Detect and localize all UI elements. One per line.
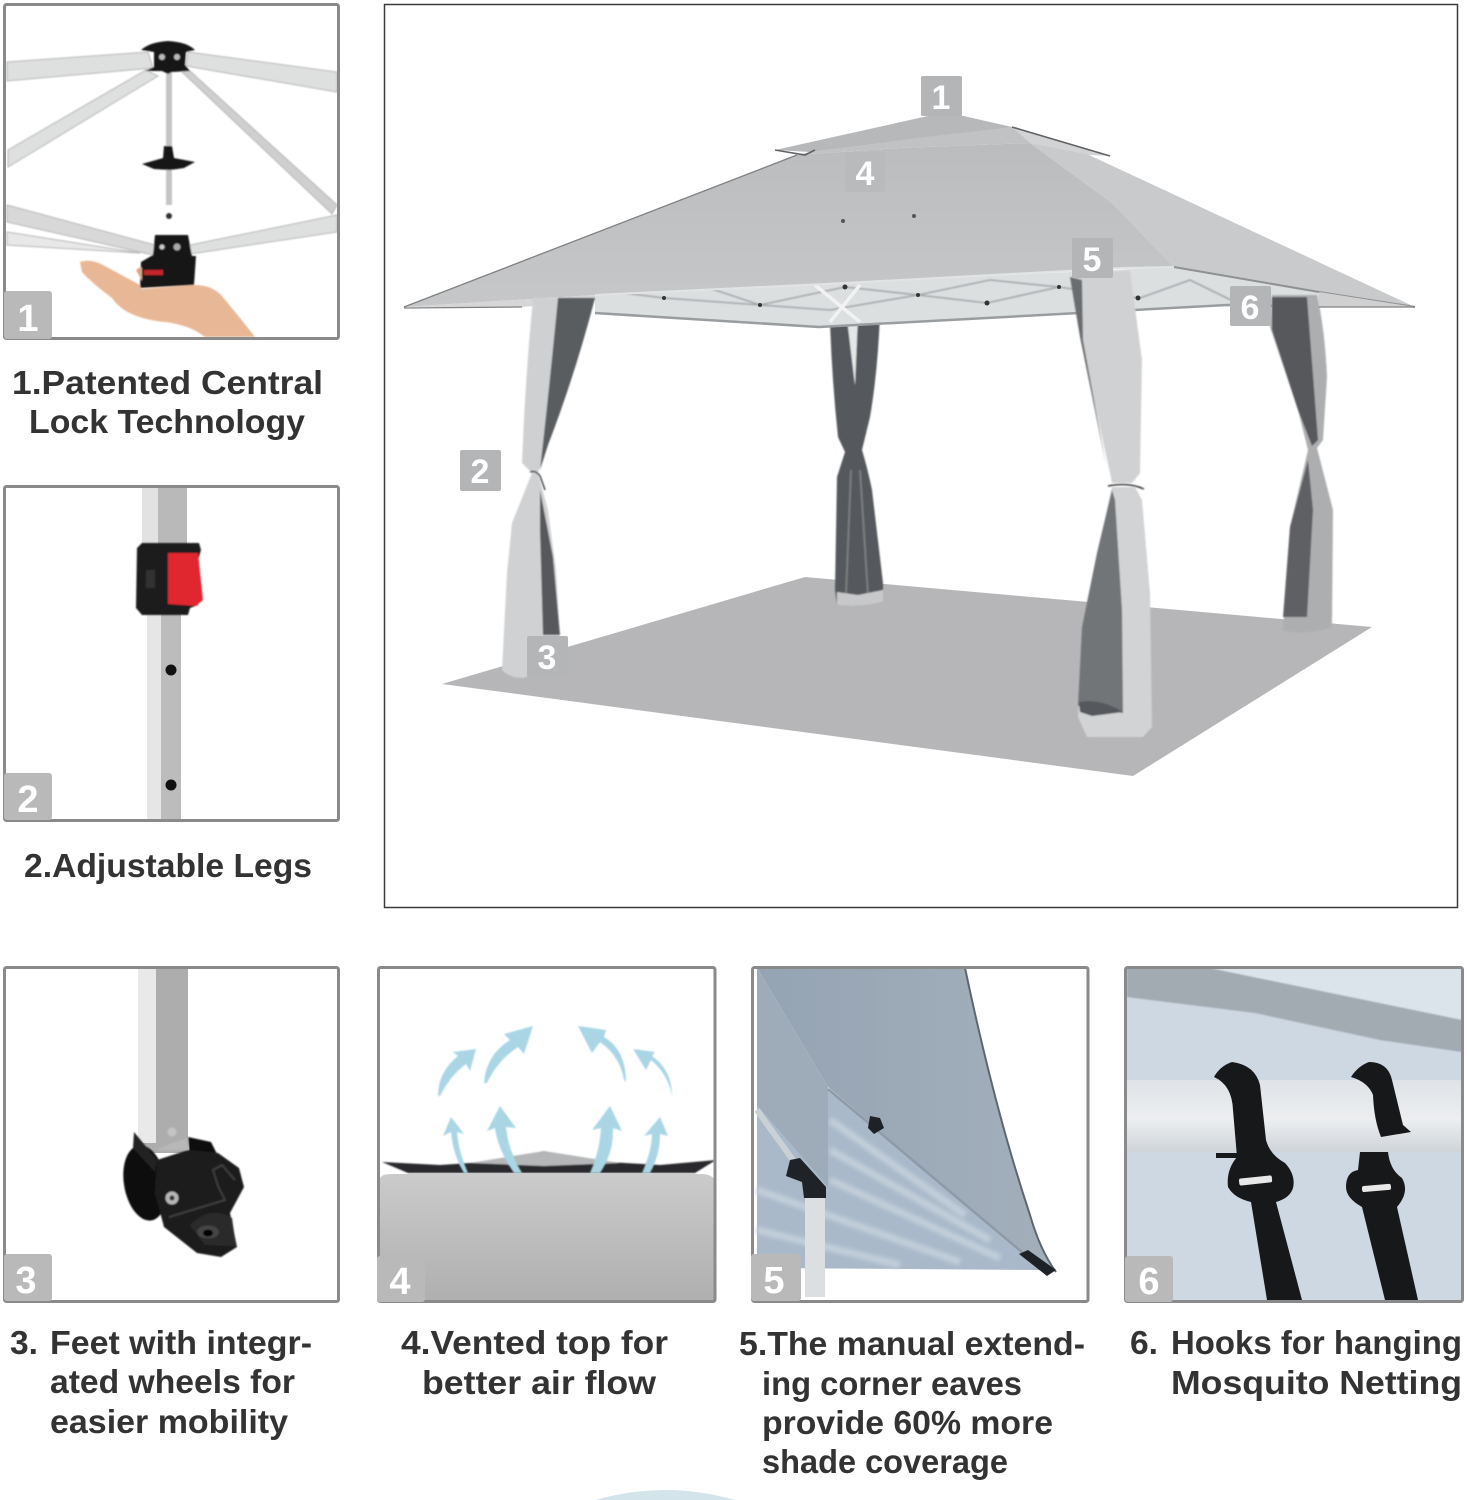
badge 2 main <box>460 450 501 491</box>
panel: wheel foot detail <box>4 968 339 1302</box>
badge 6 main <box>1230 286 1271 327</box>
caption 3: 3. <box>10 1324 38 1361</box>
badge 4: 4 <box>389 1261 411 1303</box>
main roof face <box>404 143 1174 307</box>
rear wheel bump <box>188 1137 220 1160</box>
bracket plate <box>155 1150 244 1257</box>
panel: vented top detail <box>377 968 716 1303</box>
back right leg curtain <box>1270 295 1333 632</box>
right roof facet <box>1012 127 1415 307</box>
underside of canopy <box>595 267 1320 327</box>
caption 5: 5.The manual extend- <box>739 1325 1085 1362</box>
badge 3 main: 3 <box>538 639 556 677</box>
caption 2: 2.Adjustable Legs <box>24 847 312 884</box>
badge 4 <box>377 1256 425 1303</box>
badge 2 main: 2 <box>471 453 489 491</box>
hook 2 with strap <box>1346 1062 1418 1300</box>
caption 5: shade coverage <box>762 1443 1008 1480</box>
lock pole <box>166 72 172 205</box>
frame beams of central lock <box>7 52 337 255</box>
badge 3 <box>4 1254 52 1302</box>
caption 3: Feet with integr- <box>50 1324 312 1361</box>
caption 4: better air flow <box>422 1364 656 1401</box>
front left leg curtain <box>502 298 595 678</box>
caption 6: Mosquito Netting <box>1171 1364 1462 1401</box>
caption 5: provide 60% more <box>762 1404 1053 1441</box>
panel: main gazebo <box>384 4 1458 908</box>
hand <box>80 261 255 337</box>
caption 6: 6. <box>1130 1324 1158 1361</box>
badge 5 main: 5 <box>1083 241 1101 279</box>
badge 6: 6 <box>1138 1261 1160 1303</box>
badge 1: 1 <box>17 298 39 340</box>
badge 4 main <box>845 152 885 193</box>
frame edges and clips <box>757 1110 800 1170</box>
badge 6 <box>1125 1256 1173 1303</box>
black clip with red button <box>136 543 203 615</box>
badge 4 main: 4 <box>856 155 875 193</box>
upper leg tube <box>142 487 187 545</box>
gray reinforced band <box>1127 968 1462 1052</box>
pole and bracket <box>805 1197 825 1297</box>
caption 3: easier mobility <box>50 1403 289 1440</box>
caption 5: ing corner eaves <box>762 1365 1022 1402</box>
lower leg tube <box>147 610 181 819</box>
front wheel <box>118 1142 172 1224</box>
canopy corner <box>757 968 1056 1272</box>
vent roof <box>382 1151 716 1173</box>
caption 6: Hooks for hanging <box>1171 1324 1462 1361</box>
ground mat <box>442 577 1372 776</box>
side flap <box>757 968 828 1187</box>
canopy block <box>380 1174 715 1301</box>
badge 5 main <box>1072 238 1113 279</box>
panel: adjustable legs detail <box>4 486 339 821</box>
caption 3: ated wheels for <box>50 1363 295 1400</box>
badges on main image <box>460 76 1271 677</box>
panel: corner eaves detail <box>751 968 1088 1302</box>
back left leg curtain <box>830 313 883 606</box>
T handle <box>142 146 195 170</box>
roof vent top <box>775 112 1030 152</box>
caption 1: Lock Technology <box>29 403 306 440</box>
front right leg curtain <box>1070 270 1152 737</box>
badge 1 main: 1 <box>932 79 950 117</box>
caption 6 <box>1130 1324 1462 1401</box>
underside of eave <box>757 1090 1042 1270</box>
airflow arrows <box>438 1026 672 1173</box>
badge 2: 2 <box>17 779 39 821</box>
badge 6 main: 6 <box>1241 289 1259 327</box>
bottom hub <box>140 235 196 288</box>
panel: hooks detail <box>1125 968 1462 1303</box>
badge 3 main <box>527 636 568 677</box>
adjustment holes <box>166 664 176 676</box>
caption 3 <box>10 1324 312 1440</box>
bottom edge arc <box>595 1490 735 1500</box>
badge 1 <box>4 291 52 340</box>
caption 1 <box>12 364 323 440</box>
top hub <box>141 41 195 74</box>
badge 3: 3 <box>15 1260 37 1302</box>
canopy roof <box>404 112 1415 308</box>
hook 1 with strap <box>1214 1062 1302 1300</box>
horizontal pipe <box>1127 1080 1462 1152</box>
leg tube <box>138 968 188 1153</box>
badge 2 <box>4 773 52 821</box>
caption 4: 4.Vented top for <box>401 1324 668 1361</box>
panel: central lock detail <box>4 4 339 340</box>
wheel foot <box>118 1128 244 1257</box>
caption 5 <box>739 1325 1085 1480</box>
badge 1 main <box>921 76 962 117</box>
caption 1: 1.Patented Central <box>12 364 323 401</box>
badge 5 <box>751 1254 801 1302</box>
caption 4 <box>401 1324 668 1401</box>
badge 5: 5 <box>763 1260 785 1302</box>
